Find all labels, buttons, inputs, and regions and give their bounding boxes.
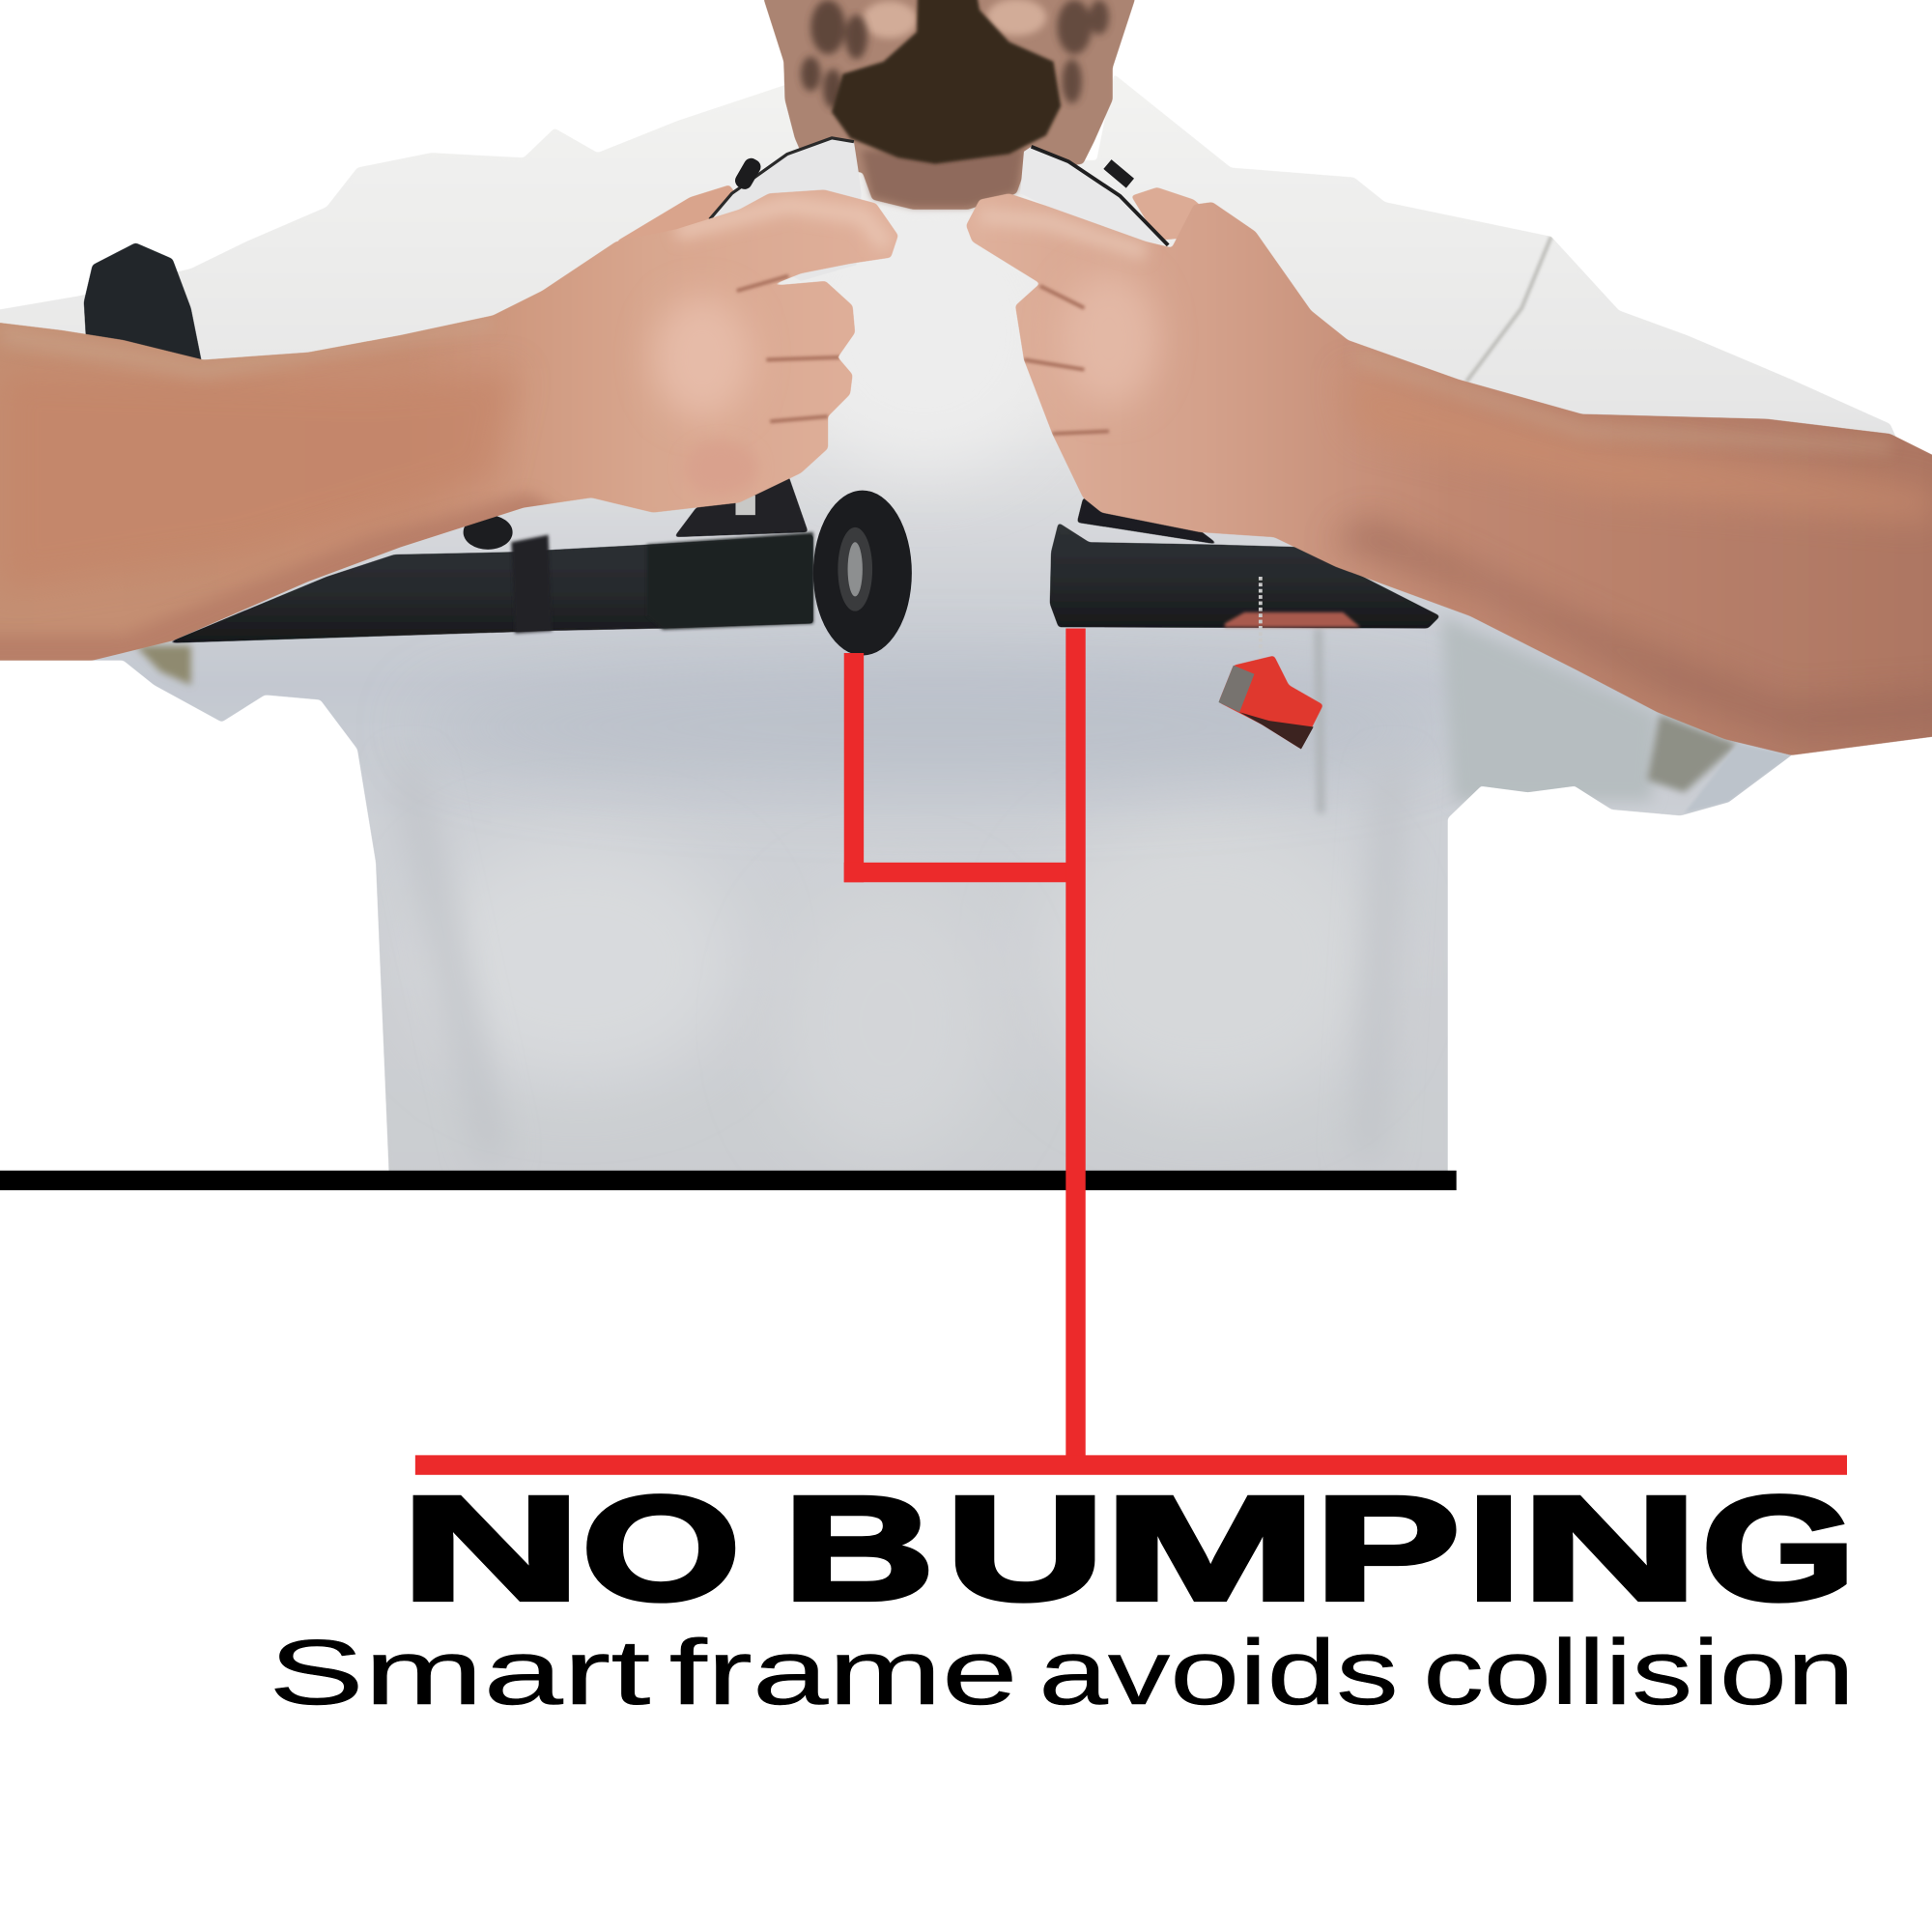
stubble left <box>801 0 867 108</box>
title: I <box>1467 1466 1520 1632</box>
left arm and hand <box>0 189 898 671</box>
left bumper disc <box>813 491 912 656</box>
stubble right <box>1057 0 1109 103</box>
red keychain tool <box>1218 656 1323 750</box>
title: O <box>582 1466 741 1632</box>
face, stubble and neck <box>764 0 1135 210</box>
key chain <box>1259 577 1262 656</box>
left hand back <box>616 185 752 283</box>
shirt <box>0 74 1932 1182</box>
left handle stem <box>674 475 809 537</box>
title: P <box>1315 1466 1460 1632</box>
red pocket glimpse <box>1225 612 1360 627</box>
right handle stem <box>1077 497 1218 545</box>
left frame tube <box>166 532 813 643</box>
right frame block <box>1050 523 1440 629</box>
white left grip <box>710 138 862 281</box>
photo: man holding handles <box>0 0 1932 1182</box>
right arm and hand <box>966 193 1932 755</box>
neck shadow <box>862 148 1024 207</box>
title: N <box>1521 1466 1698 1632</box>
subtitle: Smart <box>269 1621 650 1724</box>
title: B <box>783 1466 934 1632</box>
left knob <box>464 515 513 550</box>
white right grip <box>1020 147 1168 245</box>
subtitle: frame <box>669 1621 1018 1724</box>
title: N <box>401 1466 582 1632</box>
beard <box>832 0 1061 164</box>
red heading rule <box>415 1455 1847 1475</box>
subtitle: avoids <box>1038 1621 1399 1724</box>
black handle behind left arm <box>84 242 203 370</box>
red bracket connector <box>844 629 1086 1466</box>
black floor line <box>0 1171 1457 1190</box>
title: G <box>1701 1466 1856 1632</box>
title: M <box>1103 1466 1318 1632</box>
right hand back <box>1131 187 1233 241</box>
cheek highlights <box>863 1 917 39</box>
subtitle: collision <box>1423 1621 1855 1724</box>
title: U <box>946 1466 1104 1632</box>
